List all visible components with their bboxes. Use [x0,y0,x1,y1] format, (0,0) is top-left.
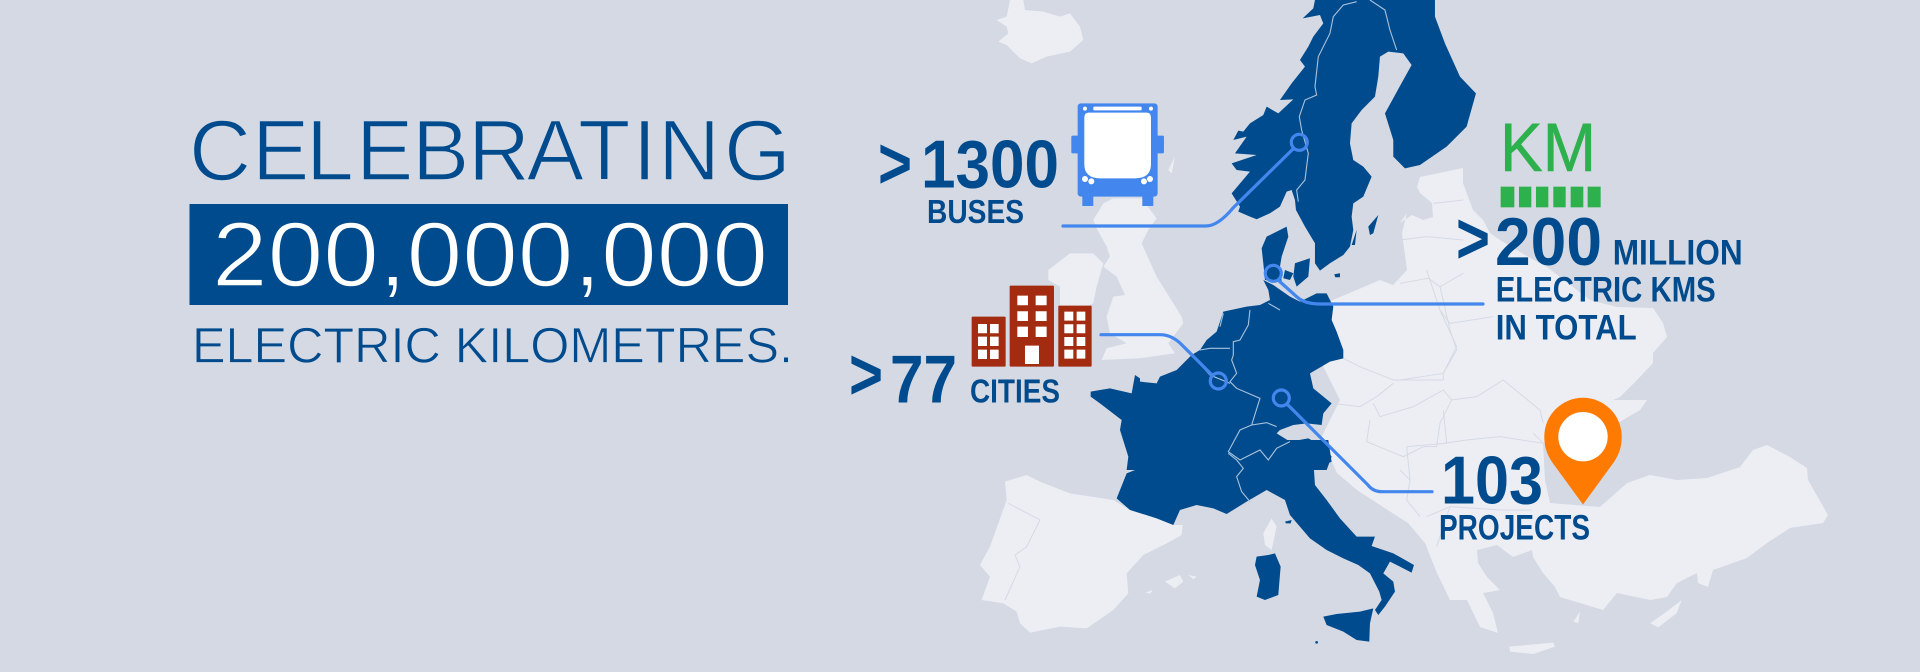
stat: total electric kilometres [1456,109,1743,347]
icon: city buildings [972,286,1092,367]
stat: buses: 1300 [921,126,1059,202]
stat: total electric kilometres: 200 [1495,204,1602,280]
connector: electric kms [1265,265,1483,304]
Scandinavia [1232,0,1476,287]
stat: buses: > [878,124,912,204]
stat: cities: CITIES [970,374,1060,411]
member countries (dark blue) [1091,0,1476,644]
stat: cities [849,286,1092,418]
internal borders of light countries [1005,200,1543,600]
connector: buses [1063,134,1307,226]
map of Europe [980,0,1828,654]
connector lines with location rings [1063,134,1483,492]
banner: 200,000,000: 200,000,000 [212,204,768,306]
stat: cities: 77 [890,342,957,418]
heading: celebrating: CELEBRATING [189,103,791,199]
southern France, Italy, Sicily, Sardinia [1117,440,1414,644]
headline [189,103,793,373]
borders within member countries [1192,0,1397,502]
subheading: electric kilometres: ELECTRIC KILOMETRES. [192,317,793,373]
stat: projects: PROJECTS [1439,508,1590,547]
stat: projects: 103 [1441,442,1543,518]
Great Britain and Ireland [1048,157,1183,360]
non-member countries (light land) [980,0,1828,654]
connector: cities [1101,335,1226,389]
stat: total electric kilometres: ELECTRIC KMS [1496,271,1716,310]
Iceland [997,0,1083,63]
Iberia, Balearics, Corsica [980,475,1277,633]
icon: KM road marker: KM [1500,109,1596,186]
connector: projects [1273,390,1432,492]
icon: bus [1071,103,1164,206]
stat: buses [878,103,1164,231]
Crete, Cyprus, Aegean islands [1509,600,1682,654]
stat: cities: > [849,335,883,415]
stat: total electric kilometres: IN TOTAL [1496,308,1637,347]
icon: orange map pin [1544,398,1622,504]
stat: projects [1439,398,1622,547]
France, Benelux, Germany, Switzerland [1091,280,1343,470]
stat: total electric kilometres: > [1456,199,1490,279]
stat: total electric kilometres: MILLION [1613,233,1743,272]
stat: buses: BUSES [927,194,1024,231]
